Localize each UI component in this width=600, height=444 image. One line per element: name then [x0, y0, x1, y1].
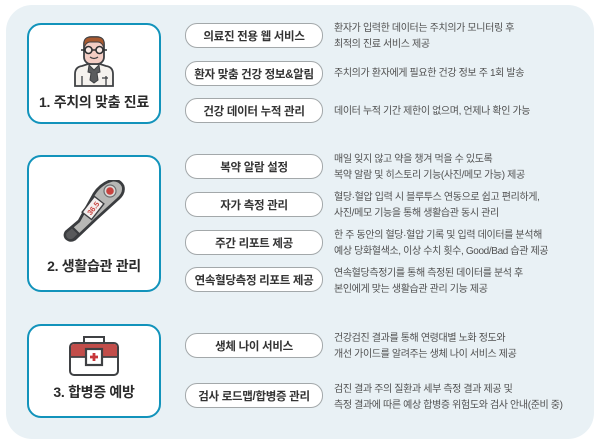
service pill: 검사 로드맵/합병증 관리 — [185, 383, 323, 408]
description: 복약 알람 설정: 매일 잊지 않고 약을 챙겨 먹을 수 있도록 — [334, 154, 492, 165]
description: 의료진 전용 웹 서비스: 최적의 진료 서비스 제공 — [334, 38, 430, 50]
service pill: 건강 데이터 누적 관리 — [185, 98, 323, 123]
panel: 2. lifestyle management — [27, 155, 161, 292]
icon: doctor — [74, 36, 114, 87]
service pill: 생체 나이 서비스 — [185, 333, 323, 358]
description: 자가 측정 관리 — [334, 191, 540, 218]
service pill: 생체 나이 서비스: 생체 나이 서비스 — [215, 341, 293, 353]
service pill: 의료진 전용 웹 서비스 — [185, 23, 323, 48]
description: 주간 리포트 제공: 예상 당화혈색소, 이상 수치 횟수, Good/Bad 습관 제공 — [334, 246, 548, 256]
service pill: 환자 맞춤 건강 정보&알림 — [185, 61, 323, 86]
description: 건강 데이터 누적 관리: 데이터 누적 기간 제한이 없으며, 언제나 확인 가능 — [334, 106, 530, 117]
heading: 1. 주치의 맞춤 진료: 1. 주치의 맞춤 진료 — [39, 94, 149, 110]
description: 환자 맞춤 건강 정보: 주치의가 환자에게 필요한 건강 정보 주 1회 발송 — [334, 68, 524, 79]
thermometer reading — [82, 196, 104, 220]
description: 검사 로드맵/합병증 관리: 측정 결과에 따른 예상 합병증 위험도와 검사 안내(준비 중) — [334, 400, 563, 410]
description: 주간 리포트 제공: 한 주 동안의 혈당·혈압 기록 및 입력 데이터를 분석해 — [334, 230, 542, 241]
service pill: 환자 맞춤 건강 정보&알림: 환자 맞춤 건강 정보&알림 — [194, 69, 314, 81]
description: 연속혈당측정 리포트 제공: 본인에게 맞는 생활습관 관리 기능 제공 — [334, 284, 488, 294]
service pill: 복약 알람 설정 — [185, 154, 323, 179]
heading: 2. 생활습관 관리: 2. 생활습관 관리 — [47, 258, 141, 274]
icon: first aid kit — [69, 336, 119, 376]
service pill: 복약 알람 설정: 복약 알람 설정 — [220, 162, 288, 174]
description: 연속혈당측정 리포트 제공: 연속혈당측정기를 통해 측정된 데이터를 분석 후 — [334, 268, 523, 279]
heading: 3. 합병증 예방: 3. 합병증 예방 — [53, 384, 135, 400]
service pill: 의료진 전용 웹 서비스: 의료진 전용 웹 서비스 — [203, 31, 305, 43]
icon: digital thermometer: 36.5 — [85, 200, 101, 217]
description: 연속혈당측정 리포트 제공 — [334, 267, 523, 294]
service pill: 주간 리포트 제공 — [185, 230, 323, 255]
service pill: 검사 로드맵/합병증 관리: 검사 로드맵/합병증 관리 — [198, 391, 310, 403]
service pill: 건강 데이터 누적 관리: 건강 데이터 누적 관리 — [203, 106, 305, 118]
service pill: 자가 측정 관리: 자가 측정 관리 — [220, 200, 288, 212]
description: 자가 측정 관리: 혈당·혈압 입력 시 블루투스 연동으로 쉽고 편리하게, — [334, 192, 540, 203]
description: 생체 나이 서비스: 건강검진 결과를 통해 연령대별 노화 정도와 — [334, 333, 505, 344]
description: 의료진 전용 웹 서비스 — [334, 22, 514, 50]
description: 검사 로드맵/합병증 관리: 검진 결과 주의 질환과 세부 측정 결과 제공 및 — [334, 384, 512, 395]
description: 검사 로드맵/합병증 관리 — [334, 383, 563, 410]
description: 자가 측정 관리: 사진/메모 기능을 통해 생활습관 동시 관리 — [334, 208, 499, 218]
panel: 3. complication prevention — [27, 324, 161, 418]
description: 생체 나이 서비스: 개선 가이드를 알려주는 생체 나이 서비스 제공 — [334, 348, 516, 360]
icon: digital thermometer — [64, 180, 125, 242]
description: 복약 알람 설정: 복약 알람 및 히스토리 기능(사진/메모 가능) 제공 — [334, 170, 525, 180]
service pill: 연속혈당측정 리포트 제공 — [185, 267, 323, 292]
service pill: 연속혈당측정 리포트 제공: 연속혈당측정 리포트 제공 — [195, 275, 313, 287]
description: 의료진 전용 웹 서비스: 환자가 입력한 데이터는 주치의가 모니터링 후 — [334, 23, 514, 34]
service pill: 주간 리포트 제공: 주간 리포트 제공 — [215, 238, 293, 250]
description: 복약 알람 설정 — [334, 153, 525, 180]
description: 주간 리포트 제공 — [334, 229, 548, 256]
service pill: 자가 측정 관리 — [185, 192, 323, 217]
panel: 1. primary doctor care — [27, 23, 161, 124]
description: 생체 나이 서비스 — [334, 332, 516, 360]
